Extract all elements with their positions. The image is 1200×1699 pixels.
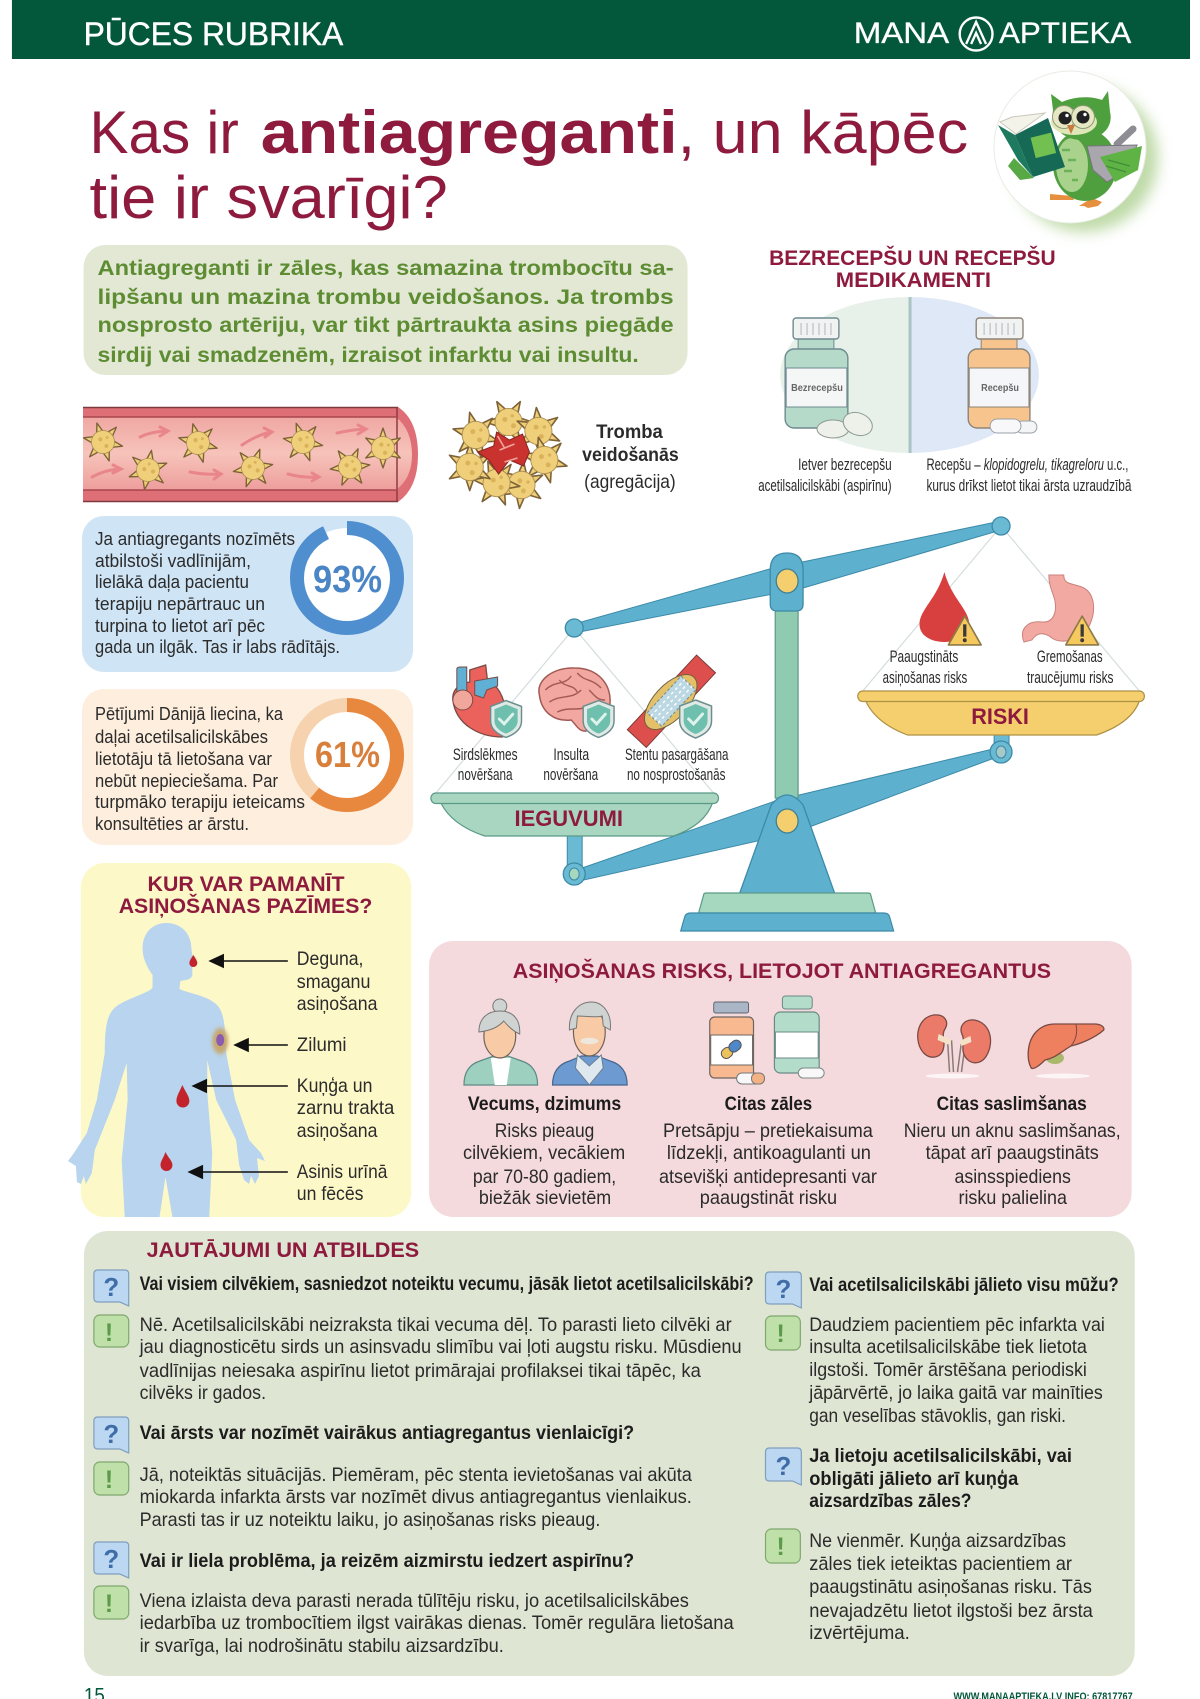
- A2: Parasti tas ir uz noteiktu laiku, jo asiņošanas risks pieaug.: [140, 1510, 600, 1531]
- A2: miokarda infarkta ārsts var nozīmēt divus antiagregantus vienlaikus.: [140, 1487, 692, 1508]
- arrow: urine: [189, 1166, 288, 1178]
- title: tie ir svarīgi?: [90, 164, 448, 231]
- section label: PŪCES RUBRIKA: [84, 16, 344, 52]
- A5: izvērtējuma.: [809, 1623, 910, 1644]
- footer: [84, 1685, 1133, 1699]
- labels: risks: [883, 648, 1114, 687]
- label: clot formation: Tromba: [596, 422, 663, 443]
- column: age and sex: par 70-80 gadiem,: [473, 1167, 616, 1188]
- A1: cilvēks ir gados.: [140, 1383, 266, 1404]
- A5: nevajadzētu lietot ilgstoši bez ārsta: [809, 1601, 1093, 1622]
- heading: OTC and prescription medicines: MEDIKAMENTI: [836, 269, 991, 292]
- Q5: obligāti jālieto arī kuņģa: [809, 1468, 1018, 1490]
- illustration: balance scale: [431, 517, 1144, 931]
- labels: bleeding signs: Zilumi: [297, 1035, 347, 1056]
- Q3: [94, 1542, 634, 1578]
- caption: OTC: acetilsalicilskābi (aspirīnu): [758, 477, 892, 495]
- A4: insulta acetilsalicilskābe tiek lietota: [809, 1337, 1087, 1358]
- left pan: benefits: [431, 793, 718, 836]
- mortar and pestle: [1117, 129, 1133, 144]
- labels: benefits: [453, 746, 729, 784]
- labels: benefits: novēršana: [458, 766, 513, 784]
- column: [775, 606, 798, 798]
- panel: intro definition: [84, 245, 688, 375]
- label: clot formation: (agregācija): [584, 472, 676, 493]
- labels: risks: Gremošanas: [1037, 648, 1103, 666]
- labels: bleeding signs: un fēcēs: [297, 1184, 363, 1205]
- title: [90, 99, 968, 231]
- Q5: Ja lietoju acetilsalicilskābi, vai: [809, 1445, 1072, 1467]
- labels: bleeding signs: asiņošana: [297, 1121, 378, 1142]
- A4: Daudziem pacientiem pēc infarkta vai: [809, 1315, 1105, 1336]
- labels: benefits: novēršana: [543, 766, 599, 784]
- icon: answer badge: !: [776, 1320, 785, 1348]
- labels: bleeding signs: [297, 949, 395, 1205]
- A1: jau diagnosticētu sirds un asinsvadu slimību vai ļoti augstu risku. Mūsdienu: [139, 1337, 742, 1358]
- column: other diseases: Citas saslimšanas: [937, 1094, 1087, 1115]
- illustration: blood vessel with platelets: [80, 407, 418, 502]
- panel: bleeding risk factors: [429, 941, 1132, 1217]
- labels: bleeding signs: Asinis urīnā: [297, 1162, 388, 1183]
- panel: 93% stat: terapiju nepārtrauc un: [95, 594, 265, 614]
- panel: 61% stat: Pētījumi Dānijā liecina, ka: [95, 704, 284, 724]
- labels: benefits: no nosprostošanās: [627, 766, 725, 784]
- icon: answer badge: !: [105, 1319, 113, 1347]
- A1: vadlīnijas neiesaka aspirīnu lietot primārajai profilaksei tikai tāpēc, ka: [140, 1361, 701, 1382]
- right pan: risks: RISKI: [971, 704, 1029, 729]
- icon: prescription bottle: [968, 318, 1037, 433]
- panel: 61% stat: nebūt nepieciešama. Par: [95, 771, 278, 791]
- A4: [766, 1315, 1105, 1427]
- icon: question bubble: ?: [103, 1421, 119, 1449]
- strings: [436, 526, 1139, 793]
- icon: OTC bottle: Bezrecepšu: [791, 383, 843, 394]
- panel: where bleeding signs show: [68, 863, 411, 1217]
- icon: answer badge: [766, 1316, 800, 1350]
- header bar: [12, 0, 1190, 59]
- column: other medicines: [659, 1094, 877, 1209]
- labels: bleeding signs: Deguna,: [297, 949, 363, 970]
- right pan link: [994, 734, 1009, 748]
- labels: bleeding signs: Kuņģa un: [297, 1076, 372, 1097]
- A1: [94, 1315, 742, 1404]
- Q4: [766, 1272, 1119, 1308]
- icon: question bubble: [766, 1272, 801, 1308]
- Q2: Vai ārsts var nozīmēt vairākus antiagregantus vienlaicīgi?: [140, 1422, 634, 1444]
- owl mascot badge: [994, 71, 1158, 232]
- arrow: nose: [210, 955, 288, 967]
- panel: medicine bottles comparison: [758, 297, 1132, 495]
- Q4: Vai acetilsalicilskābi jālieto visu mūžu?: [809, 1274, 1119, 1296]
- icon: answer badge: [94, 1462, 129, 1495]
- panel: 93% stat: lielākā daļa pacientu: [95, 572, 249, 592]
- book: [1000, 113, 1045, 134]
- column: age and sex: Vecums, dzimums: [468, 1094, 621, 1115]
- labels: bleeding signs: asiņošana: [297, 994, 378, 1015]
- labels: bleeding signs: smaganu: [297, 972, 370, 993]
- title: antiagreganti: [261, 99, 678, 166]
- column: other medicines: līdzekļi, antikoagulanti un: [667, 1143, 871, 1164]
- Q3: Vai ir liela problēma, ja reizēm aizmirstu iedzert aspirīnu?: [140, 1550, 634, 1572]
- icon: answer badge: !: [105, 1590, 113, 1618]
- icon: question bubble: ?: [775, 1276, 791, 1304]
- panel: 93% stat: Ja antiagregants nozīmēts: [95, 529, 295, 549]
- caption: OTC: Ietver bezrecepšu: [798, 456, 892, 474]
- A2: Jā, noteiktās situācijās. Piemēram, pēc stenta ievietošanas vai akūta: [140, 1465, 692, 1486]
- column: other diseases: asinsspiediens: [955, 1167, 1071, 1188]
- icon: answer badge: [94, 1586, 129, 1619]
- panel: 61% stat: lietotāju tā lietošana var: [95, 749, 272, 769]
- panel: questions and answers: [84, 1231, 1135, 1676]
- panel: intro definition: nosprosto artēriju, var tikt pārtraukta asins piegāde: [98, 314, 674, 337]
- column: other medicines: atsevišķi antidepresanti var: [659, 1167, 877, 1188]
- caption: OTC: [758, 456, 892, 495]
- panel: 93% stat: turpina to lietot arī pēc: [95, 616, 265, 636]
- panel heading: [119, 873, 372, 918]
- Q1: [94, 1270, 754, 1306]
- panel heading: ASIŅOŠANAS PAZĪMES?: [119, 894, 372, 918]
- panel: intro definition: sirdij vai smadzenēm, izraisot infarktu vai insultu.: [98, 344, 639, 367]
- A3: iedarbība uz trombocītiem ilgst vairākas dienas. Tomēr regulāra lietošana: [140, 1613, 734, 1634]
- column: other diseases: Nieru un aknu saslimšanas,: [904, 1121, 1121, 1142]
- illustration: clot formation: [438, 400, 573, 517]
- A4: gan veselības stāvoklis, gan riski.: [809, 1406, 1066, 1427]
- icon: kidneys and liver: [918, 1015, 1104, 1078]
- heading: OTC and prescription medicines: [769, 246, 1056, 292]
- brand logo: [854, 17, 1131, 50]
- icon: stent: [624, 652, 718, 750]
- caption: prescription: Recepšu – klopidogrelu, tikagreloru u.c.,: [926, 456, 1128, 474]
- column: other diseases: risku palielina: [958, 1188, 1067, 1209]
- brand logo: MANA: [854, 17, 949, 50]
- caption: prescription: [926, 456, 1132, 495]
- panel: intro definition: Antiagreganti ir zāles, kas samazina trombocītu sa-: [98, 257, 674, 280]
- base: [739, 795, 835, 894]
- left pan: benefits: IEGUVUMI: [515, 806, 623, 831]
- panel heading: JAUTĀJUMI UN ATBILDES: [147, 1239, 419, 1262]
- column: age and sex: [463, 1094, 625, 1209]
- icon: question bubble: [766, 1448, 801, 1485]
- icon: OTC bottle: [785, 318, 876, 439]
- bleeding markers: [160, 955, 228, 1171]
- icon: question bubble: ?: [103, 1546, 119, 1574]
- panel: 61% stat: konsultēties ar ārstu.: [95, 814, 249, 834]
- icon: heart: [453, 665, 522, 737]
- title: Kas ir: [90, 99, 239, 166]
- body silhouette: [68, 923, 265, 1217]
- arrow: bruises: [235, 1039, 288, 1051]
- body: [1053, 129, 1117, 201]
- icon: prescription bottle: Recepšu: [981, 383, 1019, 394]
- A4: ilgstoši. Tomēr ārstēšana periodiski: [809, 1360, 1087, 1381]
- right pan: risks: [858, 691, 1144, 735]
- icon: question bubble: [94, 1542, 129, 1578]
- panel: 93% stat: gada un ilgāk. Tas ir labs rādītājs.: [95, 637, 340, 657]
- head: [1051, 91, 1111, 140]
- label: clot formation: [582, 422, 679, 493]
- Q2: [94, 1417, 634, 1453]
- icon: blood drop with warning: [919, 572, 981, 645]
- A5: [766, 1529, 1093, 1644]
- A4: jāpārvērtē, jo laika gaitā var mainīties: [808, 1383, 1103, 1404]
- left pan link: [567, 834, 582, 866]
- pivot cap: [770, 553, 803, 611]
- heading: OTC and prescription medicines: BEZRECEPŠU UN RECEPŠU: [769, 246, 1056, 270]
- A5: zāles tiek ieteiktas pacientiem ar: [809, 1554, 1072, 1575]
- column: other diseases: [904, 1094, 1121, 1209]
- feet: [1050, 194, 1102, 208]
- icon: stomach with warning: [1022, 575, 1099, 645]
- panel: 93% stat: atbilstoši vadlīnijām,: [95, 551, 251, 571]
- icon: answer badge: [766, 1529, 800, 1563]
- Q5: aizsardzības zāles?: [809, 1490, 971, 1512]
- labels: benefits: Stentu pasargāšana: [625, 746, 729, 764]
- panel: 61% stat: turpmāko terapiju ieteicams: [95, 792, 305, 812]
- panel: 61% stat: daļai acetilsalicilskābes: [95, 727, 268, 747]
- A3: [94, 1586, 734, 1657]
- A5: Ne vienmēr. Kuņģa aizsardzības: [809, 1531, 1066, 1552]
- labels: benefits: Insulta: [553, 746, 590, 764]
- labels: risks: asiņošanas risks: [883, 669, 967, 687]
- column: other medicines: Pretsāpju – pretiekaisuma: [663, 1121, 873, 1142]
- A3: ir svarīga, lai nodrošinātu stabilu aizsardzību.: [140, 1636, 504, 1657]
- labels: risks: traucējumu risks: [1027, 669, 1114, 687]
- panel: intro definition: lipšanu un mazina trombu veidošanos. Ja trombs: [98, 286, 674, 309]
- donut chart: 61 percent: [297, 705, 397, 805]
- panel: 93% stat: [82, 516, 413, 672]
- column: other diseases: tāpat arī paaugstināts: [926, 1143, 1099, 1164]
- Q1: Vai visiem cilvēkiem, sasniedzot noteiktu vecumu, jāsāk lietot acetilsalicilskābi?: [140, 1273, 754, 1295]
- icon: answer badge: !: [105, 1466, 113, 1494]
- icon: elderly man: [553, 1002, 627, 1085]
- A1: Nē. Acetilsalicilskābi neizraksta tikai vecuma dēļ. To parasti lieto cilvēki ar: [140, 1315, 732, 1336]
- Q5: [766, 1445, 1072, 1512]
- column: other medicines: paaugstināt risku: [700, 1188, 837, 1209]
- icon: question bubble: ?: [775, 1453, 791, 1481]
- A5: paaugstinātu asiņošanas risku. Tās: [809, 1577, 1092, 1598]
- A3: Viena izlaista deva parasti nerada tūlītēju risku, jo acetilsalicilskābes: [140, 1591, 689, 1612]
- title: , un kāpēc: [678, 99, 968, 166]
- lower beam: [579, 748, 997, 881]
- arrow: stomach: [193, 1080, 288, 1092]
- labels: risks: Paaugstināts: [890, 648, 958, 666]
- donut chart: 61 percent: 61%: [315, 734, 380, 775]
- labels: bleeding signs: zarnu trakta: [297, 1098, 395, 1119]
- donut chart: 93 percent: 93%: [313, 559, 382, 601]
- column: age and sex: Risks pieaug: [495, 1121, 594, 1142]
- column: age and sex: biežāk sievietēm: [479, 1188, 611, 1209]
- label: clot formation: veidošanās: [582, 445, 679, 466]
- panel heading: KUR VAR PAMANĪT: [148, 873, 345, 896]
- panel: 61% stat: [82, 689, 413, 845]
- A2: [94, 1462, 692, 1531]
- brand logo: APTIEKA: [999, 17, 1131, 50]
- panel heading: ASIŅOŠANAS RISKS, LIETOJOT ANTIAGREGANTUS: [513, 959, 1051, 983]
- icon: question bubble: [94, 1270, 129, 1306]
- labels: benefits: Sirdslēkmes: [453, 746, 518, 764]
- icon: brain: [539, 668, 614, 737]
- icon: question bubble: [94, 1417, 129, 1453]
- column: other medicines: Citas zāles: [725, 1094, 812, 1115]
- icon: medicine bottles: [710, 996, 824, 1084]
- column: age and sex: cilvēkiem, vecākiem: [463, 1143, 625, 1164]
- icon: answer badge: [94, 1315, 129, 1347]
- donut chart: 93 percent: [297, 528, 397, 628]
- upper beam: [574, 521, 1001, 633]
- icon: elderly woman: [464, 999, 538, 1085]
- icon: question bubble: ?: [103, 1274, 119, 1302]
- icon: answer badge: !: [776, 1533, 785, 1561]
